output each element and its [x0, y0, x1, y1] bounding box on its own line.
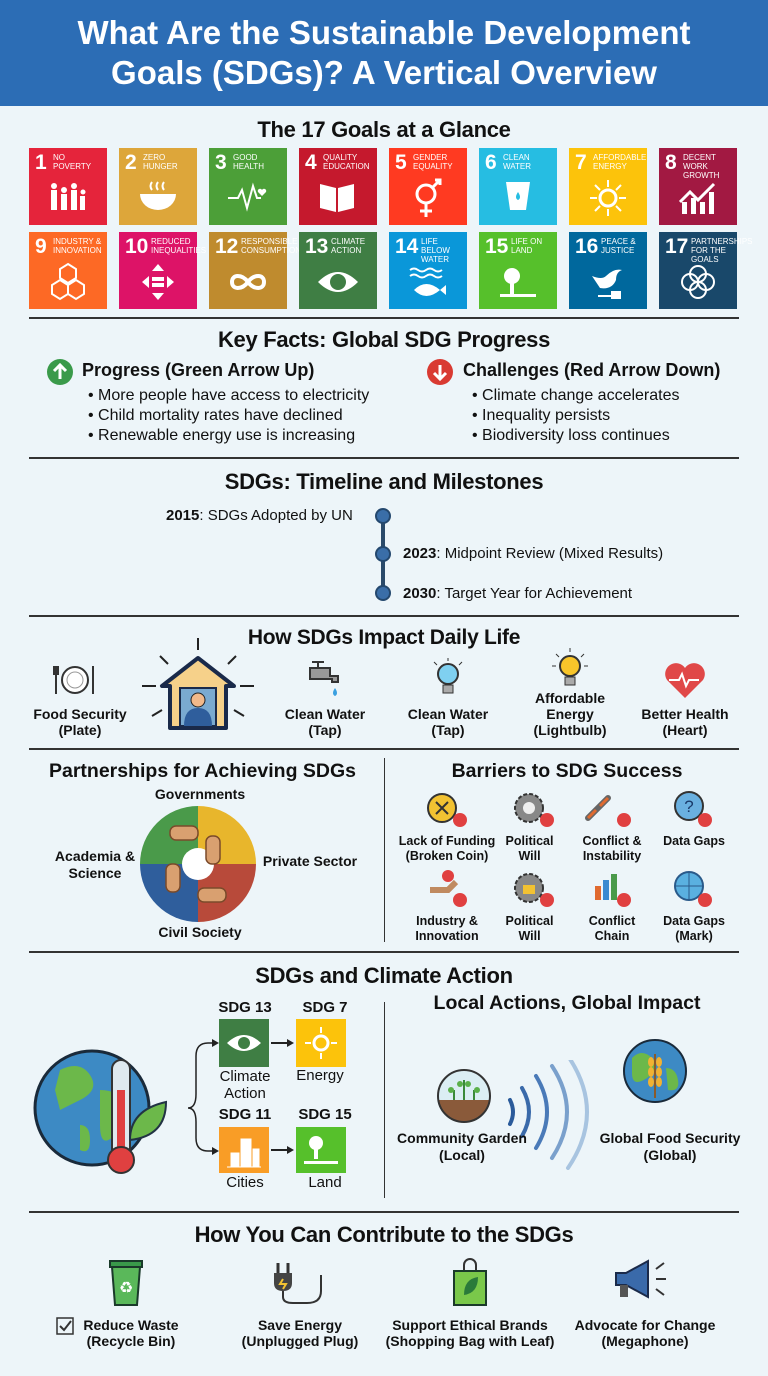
timeline: 2015: SDGs Adopted by UN [166, 507, 353, 524]
tile: sdg15 [296, 1127, 346, 1173]
panel: barriers: (Broken Coin) [406, 849, 488, 863]
title header: Goals (SDGs)? A Vertical Overview [111, 54, 657, 91]
icon: water drop bulb [434, 658, 462, 694]
panel: partnerships: Science [69, 865, 121, 881]
tile: sdg11 [219, 1127, 269, 1173]
panel: barriers: Data Gaps [663, 834, 725, 848]
arrows: branching [188, 1039, 219, 1155]
panel: contribute actions: Support Ethical Brands [392, 1317, 548, 1333]
icon: globe with wheat [623, 1039, 687, 1103]
panel: progress: • Child mortality rates have declined [88, 407, 343, 424]
barrier icons [427, 791, 712, 907]
panel: climate diagram: Action [224, 1085, 266, 1102]
goals grid: INDUSTRY & INNOVATION [53, 237, 102, 255]
icon: community garden [437, 1069, 491, 1123]
icon: house with person [142, 638, 254, 730]
panel: climate diagram: Land [308, 1174, 342, 1191]
panel: challenges: • Climate change accelerates [472, 387, 679, 404]
goals grid: 12 [215, 235, 238, 258]
panel: contribute actions: (Shopping Bag with Leaf) [386, 1333, 554, 1349]
panel: contribute actions: (Recycle Bin) [87, 1333, 175, 1349]
goals grid: 17 [665, 235, 688, 258]
panel: climate diagram: SDG 13 [218, 999, 272, 1016]
arrow 11 to 15 [271, 1146, 294, 1154]
panel: climate diagram: SDG 7 [302, 999, 348, 1016]
goals grid: QUALITY EDUCATION [323, 153, 370, 171]
heading: contribute: How You Can Contribute to the SDGs [195, 1222, 573, 1247]
panel: local actions: (Global) [644, 1147, 696, 1163]
panel: contribute actions: (Unplugged Plug) [242, 1333, 358, 1349]
goals grid: PARTNERSHIPS FOR THE GOALS [691, 237, 752, 264]
icon: megaphone [615, 1259, 666, 1299]
panel: partnerships: Governments [155, 786, 245, 802]
diagram: partnership circle [140, 806, 256, 922]
panel: barriers: Will [518, 849, 541, 863]
panel: partnerships: Partnerships for Achieving SDGs [49, 760, 356, 782]
goals grid: 1 [35, 151, 47, 174]
heading: key facts: Key Facts: Global SDG Progress [218, 327, 550, 352]
panel: barriers: Barriers to SDG Success [452, 760, 682, 782]
panel: progress: • Renewable energy use is increasing [88, 427, 355, 444]
goals grid: 16 [575, 235, 598, 258]
panel: climate diagram [34, 999, 352, 1191]
panel: progress [47, 359, 370, 444]
goals grid: LIFE ON LAND [511, 237, 542, 255]
barrier icons: ? [684, 797, 694, 816]
tile: sdg13 [219, 1019, 269, 1067]
icon: globe with thermometer [34, 1050, 167, 1174]
goals grid [29, 148, 752, 309]
panel: daily life icons: Better Health [641, 706, 729, 722]
vertical divider partnerships/barriers [384, 758, 385, 942]
panel: challenges: • Inequality persists [472, 407, 610, 424]
panel: local actions: Community Garden [397, 1130, 527, 1146]
goals grid: REDUCED INEQUALITIES [151, 237, 206, 255]
panel: daily life icons: (Heart) [662, 722, 708, 738]
timeline: 2030: Target Year for Achievement [403, 585, 632, 602]
panel: partnerships [49, 760, 357, 940]
panel: barriers: Innovation [415, 929, 479, 943]
panel: local actions [397, 992, 740, 1170]
panel: barriers: Chain [595, 929, 629, 943]
goals grid: 10 [125, 235, 148, 258]
goals grid: 2 [125, 151, 137, 174]
icon: tap [309, 661, 339, 696]
panel: daily life icons: Clean Water [408, 706, 488, 722]
heading: timeline: SDGs: Timeline and Milestones [225, 469, 543, 494]
timeline: 2023: Midpoint Review (Mixed Results) [403, 545, 663, 562]
panel: progress: Progress (Green Arrow Up) [82, 360, 314, 380]
goals grid: GOOD HEALTH [233, 153, 264, 171]
panel: challenges: • Biodiversity loss continues [472, 427, 670, 444]
goals grid: 15 [485, 235, 508, 258]
panel: local actions: Local Actions, Global Impact [434, 992, 700, 1014]
panel: local actions: Global Food Security [600, 1130, 740, 1146]
panel: daily life icons: Food Security [33, 706, 127, 722]
panel: challenges: Challenges (Red Arrow Down) [463, 360, 720, 380]
panel: barriers [399, 760, 725, 943]
goals grid: 14 [395, 235, 418, 258]
panel: climate diagram: Climate [220, 1068, 270, 1085]
panel: climate diagram: Energy [296, 1067, 344, 1084]
arrow 13 to 7 [271, 1039, 294, 1047]
panel: daily life icons: (Tap) [308, 722, 342, 738]
goals grid: DECENT WORK GROWTH [683, 153, 719, 180]
goals grid: 4 [305, 151, 317, 174]
icon: green arrow up [47, 359, 73, 385]
panel: daily life icons: Affordable [535, 690, 605, 706]
panel: barriers: Instability [583, 849, 641, 863]
heading: climate action: SDGs and Climate Action [255, 963, 513, 988]
goals grid: 6 [485, 151, 497, 174]
goals grid: CLEAN WATER [503, 153, 531, 171]
panel: climate diagram: SDG 15 [298, 1106, 352, 1123]
panel: partnerships: Private Sector [263, 853, 357, 869]
panel: daily life icons: (Tap) [431, 722, 465, 738]
goals grid: GENDER EQUALITY [413, 153, 453, 171]
panel: contribute actions: Advocate for Change [575, 1317, 715, 1333]
panel: daily life icons: (Plate) [59, 722, 101, 738]
goals grid: 8 [665, 151, 677, 174]
panel: daily life icons: (Lightbulb) [533, 722, 607, 738]
goals grid: PEACE & JUSTICE [601, 237, 636, 255]
panel: barriers: Political [506, 834, 553, 848]
goals grid: ZERO HUNGER [143, 153, 178, 171]
icon: lightbulb [552, 648, 588, 686]
icon: signal waves [508, 1060, 589, 1170]
panel: partnerships: Academia & [55, 848, 135, 864]
title header: What Are the Sustainable Development [77, 14, 691, 51]
panel: local actions: (Local) [439, 1147, 485, 1163]
icon: heart [665, 663, 705, 698]
panel: daily life icons [33, 638, 729, 738]
goals grid: LIFE BELOW WATER [421, 237, 450, 264]
panel: progress: • More people have access to electricity [88, 387, 369, 404]
icon: recycle bin: ♻ [119, 1278, 133, 1297]
goals grid: 9 [35, 235, 47, 258]
icon: red arrow down [427, 359, 453, 385]
panel: barriers: Conflict [589, 914, 635, 928]
title header [0, 0, 768, 106]
panel: contribute actions [56, 1258, 715, 1349]
goals grid: 3 [215, 151, 227, 174]
icon: unplugged plug [274, 1263, 322, 1304]
goals grid: 13 [305, 235, 328, 258]
goals grid: CLIMATE ACTION [331, 237, 365, 255]
panel: barriers: Data Gaps [663, 914, 725, 928]
panel: contribute actions: (Megaphone) [601, 1333, 689, 1349]
panel: barriers: Lack of Funding [399, 834, 495, 848]
panel: barriers: (Mark) [675, 929, 713, 943]
heading: daily life: How SDGs Impact Daily Life [248, 626, 520, 649]
panel: barriers: Industry & [416, 914, 478, 928]
goals grid: 5 [395, 151, 407, 174]
panel: contribute actions: Save Energy [258, 1317, 342, 1333]
panel: daily life icons: Energy [546, 706, 594, 722]
panel: climate diagram: SDG 11 [219, 1106, 271, 1123]
panel: challenges [427, 359, 720, 444]
panel: daily life icons: Clean Water [285, 706, 365, 722]
panel: partnerships: Civil Society [158, 924, 242, 940]
panel: barriers: Conflict & [582, 834, 642, 848]
icon: plate [53, 666, 94, 694]
panel: barriers: Political [506, 914, 553, 928]
timeline [166, 507, 663, 602]
goals grid: 7 [575, 151, 587, 174]
goals grid: AFFORDABLE ENERGY [593, 153, 646, 171]
vertical divider climate [384, 1002, 385, 1198]
goals grid: RESPONSIBLE CONSUMPTION [241, 237, 301, 255]
panel: contribute actions: Reduce Waste [83, 1317, 179, 1333]
icon: shopping bag with leaf [453, 1258, 487, 1306]
goals grid: NO POVERTY [53, 153, 91, 171]
heading: 17 goals: The 17 Goals at a Glance [257, 117, 511, 142]
panel: barriers: Will [518, 929, 541, 943]
panel: climate diagram: Cities [226, 1174, 264, 1191]
icon: checkbox [56, 1317, 74, 1335]
icon: recycle bin [109, 1260, 143, 1306]
tile: sdg7 [296, 1019, 346, 1067]
